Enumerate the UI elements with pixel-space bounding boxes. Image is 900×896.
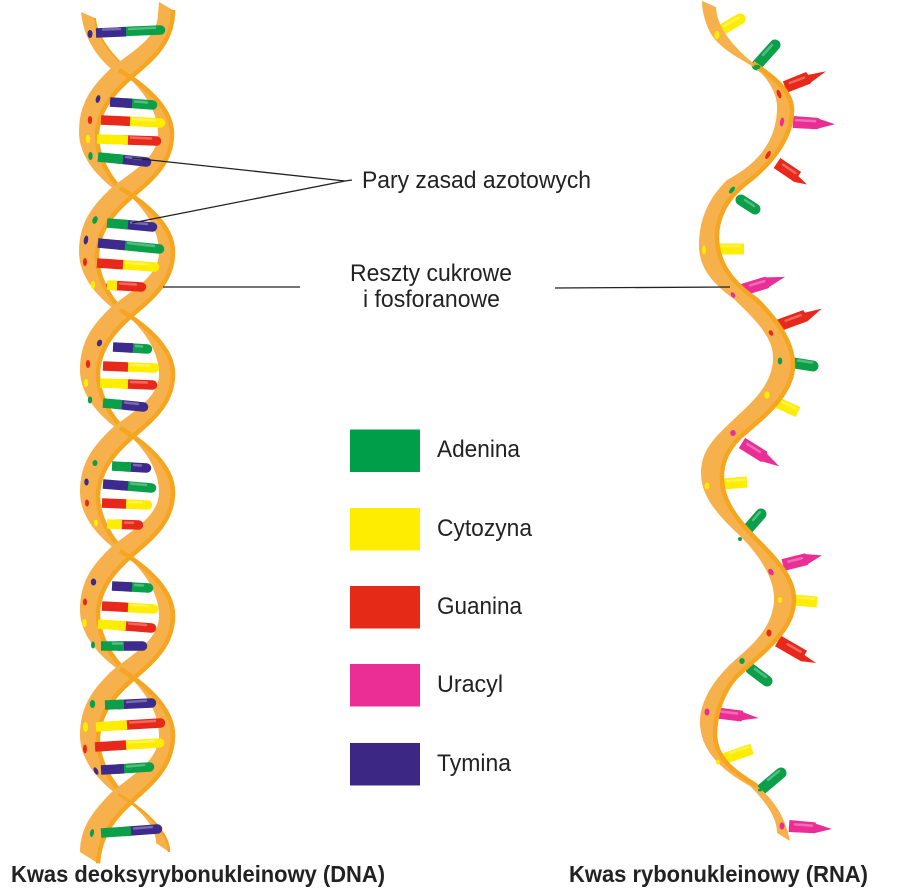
base: yellow [723,480,747,484]
base: red spike [775,636,819,668]
legend item: Guanina: Guanina [437,593,522,620]
label: sugar and phosphate residues [350,260,512,313]
base pair A-T [107,222,152,227]
base: yellow [794,598,817,602]
base pair T-A [101,765,150,770]
base: red spike [774,158,811,189]
base pair G-C [103,365,154,368]
legend [350,430,532,786]
base pair C-G [97,138,156,141]
base: yellow [718,18,740,32]
base pair G-C [95,741,160,747]
label: base pairs: Pary zasad azotowych [362,167,591,194]
base: green [741,200,755,209]
RNA dots [702,31,785,830]
base pair A-T [105,701,152,705]
DNA ribbon segment 5 [80,551,173,798]
base: green [757,45,775,65]
title: DNA: Kwas deoksyrybonukleinowy (DNA) [11,861,385,887]
DNA ribbon segment 4 [80,428,173,672]
base pair C-G [100,382,152,385]
base pair T-A top [96,28,160,33]
base: green [751,669,767,681]
legend item: Tymina: Tymina [437,750,511,777]
label: sugar and phosphate residues: Reszty cukrowe [350,260,512,287]
base pair A-T [98,157,146,162]
DNA top left strand tail [81,12,130,78]
DNA ribbon segment from top right [79,2,173,194]
base pair A-T bottom [101,827,158,833]
base pair A-T [101,644,142,646]
DNA double helix [79,2,173,863]
base: pink spike [782,550,823,571]
base: red spike [775,304,824,332]
legend item: Uracyl: Uracyl [437,671,503,698]
DNA ribbon segment 3 [80,310,173,554]
base: red spike [783,65,828,93]
RNA bases behind ribbon [716,18,835,835]
label: sugar and phosphate residues: i fosforanowe [363,286,500,313]
RNA ribbon [699,1,794,841]
DNA ribbon segment 2 [80,188,173,432]
legend item: Cytozyna: Cytozyna [437,515,532,542]
RNA single strand [699,1,835,841]
base pair G-C [102,605,154,609]
base: pink spike [716,708,759,724]
base pair G-C [102,502,148,505]
DNA lower right strand tail [118,794,169,852]
base: yellow [718,246,744,249]
base: yellow [778,402,798,412]
base: green [747,512,761,530]
leader line: DNA sugar phosphate [163,286,300,288]
base pair C-G [98,624,152,628]
base pair T-A [110,102,152,105]
legend item: Guanina [350,586,522,628]
base pair T-A [103,484,152,488]
DNA ribbon segment 6 to lower left tail [80,669,173,863]
base: pink spike [740,271,787,296]
legend item: Adenina: Adenina [437,436,520,463]
title: RNA: Kwas rybonukleinowy (RNA) [569,861,868,887]
base pair C-G [107,522,138,525]
legend item: Tymina [350,743,511,786]
DNA base pairs [95,28,160,833]
base pair C-G [107,284,142,287]
base: pink spike [789,820,832,835]
base pair C-G [96,721,160,727]
legend item: Cytozyna [350,508,532,550]
leader line: RNA sugar phosphate [555,287,730,288]
base pair T-A [112,585,148,588]
DNA sugar-phosphate dots [82,30,103,837]
base pair G-C [101,119,160,123]
leader lines: base pairs [132,158,352,223]
legend item: Adenina [350,430,520,472]
legend item: Uracyl [350,664,503,706]
DNA ribbon segment 1 [79,70,172,314]
base pair G-C [97,262,154,267]
base: pink spike [739,438,782,471]
base: pink spike [793,116,835,130]
base: yellow [723,747,752,759]
base: green [794,360,813,366]
base pair T-A [113,346,148,349]
base pair A-T [112,465,146,468]
base: green [762,771,781,789]
base pair T-A [98,243,160,249]
base pair A-T [103,402,144,407]
